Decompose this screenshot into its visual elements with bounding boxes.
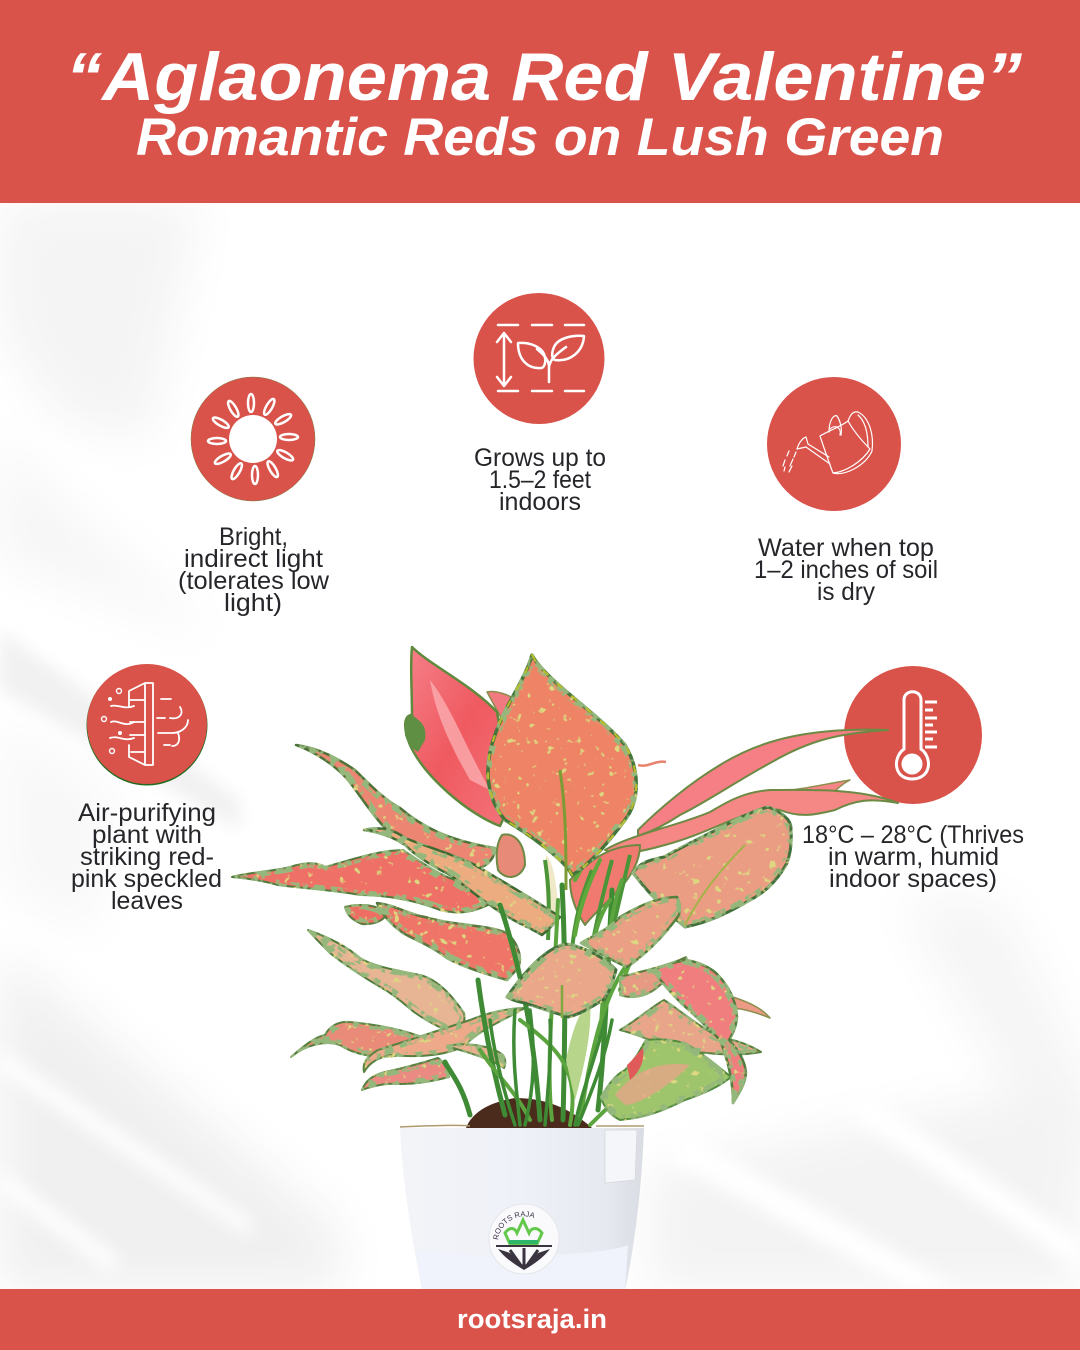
plant: pot	[400, 1125, 644, 1290]
text: light	[178, 523, 330, 617]
icon: sun	[191, 377, 315, 501]
subtitle: Romantic Reds on Lush Green	[136, 108, 944, 167]
text: light: (tolerates low	[178, 567, 330, 595]
potted plant	[231, 646, 899, 1289]
icon: plant height	[474, 293, 604, 424]
feature: air purifying	[71, 664, 222, 915]
text: water: Water when top	[758, 534, 934, 562]
text: water	[754, 534, 938, 606]
text: air purifying: Air-purifying	[78, 799, 216, 827]
icon: air filter	[86, 664, 208, 786]
feature: light	[178, 377, 330, 617]
text: temperature: 18°C – 28°C (Thrives	[802, 821, 1024, 849]
icon: thermometer	[844, 666, 982, 804]
plant: left leaves	[232, 745, 560, 1090]
text: light: Bright,	[219, 523, 288, 551]
header banner	[0, 0, 1080, 203]
icon: watering can	[767, 377, 901, 511]
pot logo: Roots Raja: ROOTS RAJA	[493, 1211, 534, 1240]
text: temperature	[802, 821, 1024, 893]
pot logo: Roots Raja	[488, 1204, 560, 1274]
text: temperature: indoor spaces)	[829, 865, 997, 893]
website address: rootsraja.in	[457, 1304, 607, 1334]
text: light: indirect light	[184, 545, 323, 573]
title: “Aglaonema Red Valentine”	[66, 39, 1022, 115]
text: air purifying: leaves	[111, 887, 183, 915]
feature: height	[474, 293, 606, 516]
text: height: Grows up to	[474, 444, 606, 472]
plant: front leaves	[507, 807, 791, 1120]
text: air purifying: plant with	[92, 821, 202, 849]
text: height: indoors	[499, 488, 581, 516]
plant: centre leaf	[488, 655, 636, 890]
text: height: 1.5–2 feet	[489, 466, 591, 494]
feature: temperature	[802, 666, 1024, 893]
plant: soil	[466, 1098, 592, 1128]
feature: water	[754, 377, 938, 606]
plant: back leaves	[405, 647, 898, 960]
footer bar	[0, 1289, 1080, 1350]
text: light: light)	[224, 589, 282, 617]
text: water: 1–2 inches of soil	[754, 556, 938, 584]
text: air purifying: striking red-	[80, 843, 214, 871]
text: water: is dry	[817, 578, 875, 606]
text: air purifying: pink speckled	[71, 865, 222, 893]
text: height	[474, 444, 606, 516]
text: air purifying	[71, 799, 222, 915]
plant: stems	[445, 850, 655, 1125]
text: temperature: in warm, humid	[828, 843, 999, 871]
